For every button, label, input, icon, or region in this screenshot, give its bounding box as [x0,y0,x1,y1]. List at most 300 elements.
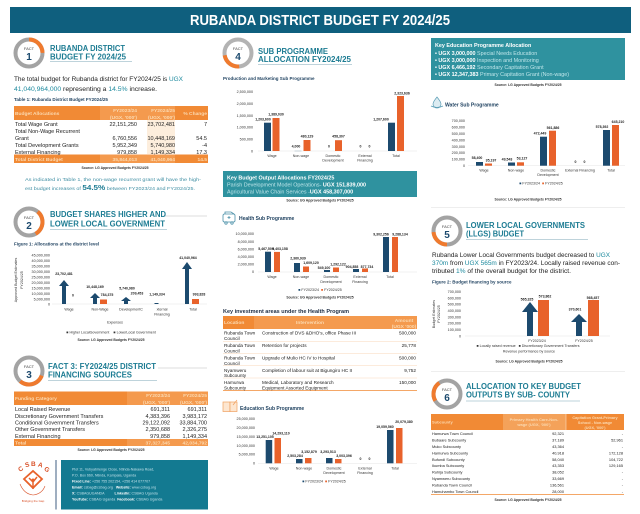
chart: financing by source: Budget Estimates [432,300,436,328]
table: funding category: 1,149,334 [183,434,207,440]
table: budget allocations: 5,740,980 [151,143,175,149]
chart: production and marketing: 2,000,000 [237,102,253,106]
table: health investments: Construction of DVS &DHO's, office Phase III [262,330,356,336]
chart: allocations: Non-Wage [91,308,109,312]
chart: allocations: Approved Budget Estimates [14,258,18,302]
table: funding category: Discretionary Government Transfers [15,414,104,420]
table: health investments: Hamurwa [224,380,244,385]
chart: education: Financing [357,471,373,475]
table: budget allocations: Total Wage Grant [15,122,58,128]
chart: water: 0 [584,160,586,164]
table: health investments: (UGX '000) [392,324,417,330]
heading: fact 6 [466,382,581,401]
icon: ambulance [223,212,235,224]
divider bar [56,460,57,510]
icon: fact 2 ring: FACT [24,215,35,220]
panel: contact details: Email: csbag@csbag.org Website: www.csbag.org [72,486,156,490]
table: health investments [223,316,417,390]
table: health investments: Upgrade of Mulio HC IV to Hospital [262,356,335,360]
source note: Source: LG Approved Budgets FY2024/25 [78,448,145,452]
panel: contact details: Plot 11, Vubyabirenge Close, Ntinda-Nakawa Road, [72,468,154,472]
chart: allocations: 5,740,980 [119,286,135,290]
chart: health: ■ FY2023/24 ■ FY2024/25 [298,288,342,292]
chart: financing by source: 370,601 [569,308,581,312]
table: funding category: (UGX, '000') [180,400,207,406]
chart: production and marketing: 2,500,000 [237,90,253,94]
icon: fact 6 ring [429,376,465,412]
chart: production and marketing: 4,000 [292,144,300,148]
chart: financing by source: FY2023/24 [528,339,546,343]
chart: health: 4,000,000 [238,255,254,259]
panel: contact details: YouTube: CSBAG Uganda Facebook: CSBAG Uganda [72,498,162,502]
heading: fact 3: FACT 3: FY2024/25 DISTRICT [48,362,156,371]
chart: health: 1,292,122 [330,263,346,267]
table: budget allocations: External Financing [15,150,61,156]
chart: allocations: 209,453 [131,292,143,296]
table: allocations by sub-county: 52,961 [611,438,623,443]
chart: water: Wage [479,168,489,172]
chart: education: 3,003,396 [336,454,352,458]
chart: health: 549,100 [318,266,330,270]
chart: allocations: 23,702,481 [55,272,73,276]
icon: fact 2 ring: 2 [26,221,32,232]
icon: fact 1 ring: 1 [26,52,32,63]
chart: education: 3,293,513 [320,450,336,454]
chart: production and marketing: Wage [267,154,277,158]
table: funding category: Funding Category [15,396,57,402]
chart: health: Total [386,275,394,279]
table: funding category: FY2024/25 [183,393,207,399]
chart: financing by source: 600,000 [448,296,461,300]
callout: key budget outputs [223,171,417,197]
chart: water: 0 [463,164,465,168]
text block: LLG budget: 370m from UGX 565m in FY2023/24. Locally raised revenue con- [432,260,620,267]
logo: CSBAG: A [37,462,44,470]
chart: water: 472,449 [534,132,546,136]
table: health investments: Rubanda Town [224,330,256,336]
table: health investments: Council [224,336,240,341]
table: budget allocations: -4 [202,143,207,149]
chart: health: 9,288,134 [392,232,408,236]
chart: health: 2,000,000 [238,263,254,267]
chart: health: 904,858 [346,265,358,269]
chart: production and marketing: Non-wage [293,154,309,158]
table: budget allocations: 17.3 [196,150,207,156]
table: health investments: Rubanda Town [224,356,256,360]
table: health investments: 500,000 [399,330,416,336]
chart: health: 8,000,000 [238,240,254,244]
heading: fact 4: ALLOCATION FY2024/25 [258,55,352,64]
chart: education: Total [391,466,399,470]
chart: allocations: 25,000,000 [32,276,50,280]
table: funding category: 2,350,688 [146,427,170,433]
chart: allocations: ■ Higher LocalGovernment ■ LowerLocal Government [66,330,156,334]
chart: production and marketing: 500,000 [240,138,253,142]
table: budget allocations: (UGX, '000') [110,115,137,121]
icon: fact 6 ring: FACT [442,387,453,392]
icon: fact 4 ring: 4 [235,52,241,63]
chart: education: 0 [369,457,371,461]
icon: fact 1 ring: FACT [24,46,35,51]
chart: water [452,119,625,186]
table: health investments: Medical, Laboratory and Research [262,380,334,385]
chart: education: 0 [360,457,362,461]
table: allocations by sub-county: - [622,476,624,481]
table: allocations by sub-county: Nyamweru Subcounty [432,476,470,481]
table: health investments: Nyamweru [224,368,247,373]
chart: allocations: 5,000,000 [34,298,50,302]
text block: LLG budget: tributed 1% of the overall budget for the district. [432,268,571,275]
chart: water: 49,543 [502,158,512,162]
table: allocations by sub-county: Primary Health Care-Non- [510,417,559,422]
heading: fact 3: FINANCING SOURCES [48,370,133,380]
table: funding category: 37,327,345 [146,440,170,446]
chart: production and marketing: 0 [328,144,330,148]
chart: allocations: 10,000,000 [32,292,50,296]
table: allocations by sub-county: Hamurwa Town Council [432,431,473,436]
chart: water: 500,000 [452,132,465,136]
table: allocations by sub-county: 40,918 [552,450,564,455]
chart: financing by source: 0 [459,334,461,338]
chart: health: External [353,275,367,279]
callout: highest increase: est budget increases of 54.5% between FY2023/24 and FY2024/25. [25,185,195,192]
table: health investments: Subcounty [224,386,247,390]
table: health investments: Retention for projects [262,343,307,348]
icon: open book [223,400,237,412]
table: health investments: Location [224,320,244,326]
table: budget allocations: 14.5 [197,157,207,163]
chart: allocations: Expenses [107,320,123,324]
icon: water drop [431,97,443,108]
table: health investments: Council [224,348,240,354]
table: allocations by sub-county: Muko Subcounty [432,444,461,449]
chart: health: 6,000,000 [238,247,254,251]
chart: water: 200,000 [452,151,465,155]
panel: fact 4 [223,38,417,202]
heading: fact 4: SUB PROGRAMME [258,47,329,56]
chart: education: 25,000,000 [237,417,255,421]
chart: water: 35,197 [486,158,496,162]
source note: Source: LG Approved Budgets FY2024/25 [78,338,145,342]
panel: water sub programme [431,97,625,202]
table: allocations by sub-county: Hamurwa Subcounty [432,450,468,455]
chart: water: 58,400 [472,156,482,160]
chart: production and marketing [237,90,417,162]
table: funding category: 979,858 [150,434,170,440]
chart: water: 600,000 [452,126,465,130]
title banner: RUBANDA DISTRICT BUDGET FY 2024/25 [190,13,450,29]
table: allocations by sub-county: 92,321 [552,431,564,436]
chart: health: Development [320,280,342,284]
table: health investments: 500,000 [399,356,416,360]
chart: education: 0 [253,462,255,466]
chart: health: 5,403,158 [272,247,288,251]
source note: Source: LG Approved Budgets FY2024/25 [495,83,562,87]
chart: allocations: 0 [72,294,74,298]
logo: CSBAG: B [31,461,36,468]
heading: fact 1: BUDGET FY 2024/25 [50,52,127,62]
panel: fact 1 [14,40,208,192]
chart: financing by source [432,290,610,354]
table: budget allocations: 22,151,250 [109,122,137,128]
heading: water: Water Sub Programme [445,102,499,108]
chart: education: Non-wage [296,466,312,470]
icon: fact 5 ring [434,218,460,244]
logo: CSBAG: C [17,465,25,474]
chart: health: 9,302,256 [373,232,389,236]
chart: allocations: xternal [157,308,168,312]
chart: water: ■ FY2023/24 ■ FY2024/25 [519,182,563,186]
chart: water: 300,000 [452,145,465,149]
chart: education: Wage [269,466,279,470]
chart: education: 15,000,000 [237,435,255,439]
panel: contact details [61,460,208,510]
chart: water: Total [607,168,615,172]
table: allocations by sub-county: - [622,482,624,487]
text block: LLG budget [432,252,620,275]
table: budget allocations: Total Non-Wage Recurrent [15,129,80,135]
table: health investments: Intervention [296,320,324,326]
chart: allocations: 15,000,000 [32,286,50,290]
logo: CSBAG [17,461,51,503]
table: budget allocations: (UGX, '000') [148,115,175,121]
icon: fact 4 ring: FACT [233,46,244,51]
heading: fact 1 [50,44,132,62]
table: budget allocations [14,106,208,163]
callout: key education allocation: Key Education Programme Allocation [435,43,531,49]
panel: fact 2 [10,203,207,342]
text block: total budget: 41,040,964,000 representing a 14.5% increase. [14,86,157,93]
icon: fact 5 ring: 5 [444,230,450,241]
chart: financing by source: 568,457 [587,296,599,300]
table: allocations by sub-county: Rubanda Town Council [432,482,472,487]
chart: education: 20,000,000 [237,426,255,430]
chart: production and marketing: 1,203,600 [255,118,271,122]
table: allocations by sub-county: 172,128 [609,450,623,455]
table: allocations by sub-county: School - Non-wage [578,421,612,425]
heading: fact 5: (LLGS) BUDGET [466,230,524,238]
table: funding category: Other Government Transfers [15,427,85,433]
table: allocations by sub-county: 58,040 [552,457,565,462]
table: budget allocations: Budget Allocations [15,111,60,117]
table: budget allocations: Total District Budget [15,157,63,163]
chart: education: ■ FY2023/24 ■ FY2024/25 [302,480,346,484]
chart: financing by source: 500,000 [448,303,461,307]
chart: allocations: 45,000,000 [32,254,50,258]
icon: fact 4 ring [223,38,253,68]
heading: fact 5: LOWER LOCAL GOVERNMENTS [466,221,586,230]
chart: allocations: 41,040,964 [179,256,197,260]
heading: fact 2: LOWER LOCAL GOVERNMENT [50,220,165,228]
chart: allocations: 10,448,169 [86,285,104,289]
callout: key budget outputs: Agricultural Value Chain Services -UGX 458,307,000 [227,190,353,196]
chart: production and marketing: 480,129 [301,134,313,138]
table: health investments: Council [224,361,240,366]
chart: water: 561,886 [547,126,559,130]
chart: allocations: 784,375 [101,293,113,297]
chart: production and marketing: 1,207,600 [373,118,389,122]
table: allocations by sub-county: Ikumba Subcounty [432,463,464,468]
panel: contact details: P.O. Box 660, Ntinda, Kampala, Uganda [72,474,136,478]
chart: allocations: 20,000,000 [32,281,50,285]
table: health investments: Completion of labour suit at Bigungiro HC II [262,368,352,373]
source note: Source: LG Approved Budgets FY2024/25 [496,360,563,364]
chart: health [236,232,417,292]
heading: fact 2 [50,210,207,230]
chart: production and marketing: Domestic [326,154,341,158]
panel: fact 5 [431,208,625,372]
table: health investments: 150,000 [399,380,416,385]
callout: key education allocation [431,38,625,80]
chart: production and marketing: 1,389,030 [268,112,284,116]
table: funding category: 29,122,092 [142,420,170,426]
chart: education: 20,079,380 [395,420,413,424]
table: allocations by sub-county: wage (UGX, '000') [516,422,551,427]
chart: education: Domestic [327,466,342,470]
chart: education: 2,503,284 [287,454,303,458]
table: allocations by sub-county: 43,364 [552,444,565,449]
table: funding category: 691,311 [151,407,170,413]
table: health investments: Rubanda Town [224,343,256,348]
chart: allocations: DevelopmentC [119,308,143,312]
table: budget allocations: 1,149,334 [151,150,175,156]
heading: fact 6: OUTPUTS BY SUB- COUNTY [466,390,571,400]
chart: financing by source: 700,000 [448,290,461,294]
chart: production and marketing: 0 [360,144,362,148]
chart: production and marketing: Financing [357,158,373,162]
callout: highest increase: As indicated in Table 1, the non-wage recurrent grant will have the high- [25,177,202,182]
table: allocations by sub-county: - [622,489,624,494]
chart: production and marketing: 1,500,000 [237,114,253,118]
table: budget allocations: 23,702,481 [147,122,175,128]
table: allocations by sub-county: Bubaare Subcounty [432,438,466,443]
text block: total budget [14,76,183,93]
chart: allocations: Total [189,308,197,312]
table: allocations by sub-county: (UGX, '000') [584,426,606,430]
chart: financing by source: 100,000 [448,328,461,332]
table: allocations by sub-county: Bufundi Subcounty [432,457,465,462]
chart: water: 400,000 [452,138,465,142]
chart: health: Domestic [324,275,339,279]
chart: production and marketing: 2,323,636 [394,92,410,96]
table: allocations by sub-county: - [622,444,624,449]
chart: production and marketing: Total [392,154,400,158]
chart: water: External Financing [565,168,595,172]
chart: financing by source: Revenue performance by source [503,350,555,354]
chart: allocations: FY2024/25 [20,271,24,289]
panel: education sub programme [223,400,417,484]
table: allocations by sub-county: 38,052 [552,470,564,475]
callout: key budget outputs: Key Budget Output Allocations FY2024/25 [227,176,334,182]
chart: education [237,417,417,484]
chart: education: External [358,466,372,470]
table: funding category: 4,383,396 [146,414,170,420]
chart: financing by source: FY2024/25 [575,339,593,343]
table: allocations by sub-county: 43,353 [552,463,564,468]
heading: fact 1: RUBANDA DISTRICT [50,44,125,53]
heading: fact 3 [48,362,207,380]
chart: water: Non-wage [508,168,524,172]
table: funding category: (UGX, '000') [143,400,170,406]
table: allocations by sub-county: Subcounty [432,420,453,424]
chart: production and marketing: 0 [251,149,253,153]
chart: health: Wage [267,275,277,279]
table: budget allocations: 979,858 [117,150,137,156]
figure caption: Figure 2: Budget financing by source [432,280,512,284]
table: funding category: 2,326,275 [183,427,207,433]
chart: water: 700,000 [452,119,465,123]
chart: water: 645,210 [612,120,624,124]
heading: education: Education Sub Programme [240,406,304,412]
chart: allocations: 1,149,334 [149,292,165,296]
sub-heading: production: Production and Marketing Sub Programme [223,76,315,81]
source note: Source: LG Approved Budgets FY2024/25 [495,198,562,202]
chart: health: 10,000,000 [236,232,254,236]
panel: contact details: X: CSBAGUGANDA LinkedIn: CSBAG Uganda [72,492,158,496]
table: allocations by sub-county: 37,189 [552,438,564,443]
chart: education: 10,000,000 [237,444,255,448]
heading: fact 6: ALLOCATION TO KEY BUDGET [466,382,581,391]
chart: education: 19,059,560 [376,425,394,429]
table: funding category: Local Raised Revenue [15,407,70,413]
chart: health: Non-wage [293,275,309,279]
table: budget allocations: 35,844,013 [113,157,137,163]
chart: education: 3,152,879 [301,450,317,454]
table: allocations by sub-county: 104,722 [609,457,623,462]
table: budget allocations: 54.5 [196,136,207,142]
callout: highest increase [25,177,202,192]
chart: financing by source: 200,000 [448,322,461,326]
chart: water: Development [537,173,559,177]
table: health investments: Equipment Assorted Equipment [262,386,328,390]
table: funding category [14,392,208,446]
table: health investments: 9,752 [404,368,416,373]
text block: total budget: The total budget for Rubanda district for FY2024/25 is UGX [14,76,183,83]
chart: allocations: 0 [48,302,50,306]
panel: health sub programme [223,212,417,390]
chart: allocations: Financing [154,312,170,316]
chart: health: 5,467,509 [258,247,274,251]
chart: production and marketing: 0 [369,144,371,148]
chart: financing by source: 400,000 [448,309,461,313]
chart: education: 14,293,110 [272,432,290,436]
icon: fact 3 ring: 3 [26,370,32,381]
table: funding category: Conditional Government Transfers [15,420,99,426]
chart: allocations: 35,000,000 [32,264,50,268]
chart: education: Development [323,471,345,475]
table: allocations by sub-county: - [622,431,624,436]
table: budget allocations: 6,760,556 [113,136,137,142]
table: funding category: 33,884,700 [179,420,207,426]
title banner [10,7,631,33]
chart: water: 578,392 [596,125,608,129]
table: budget allocations: 41,040,964 [151,157,175,163]
table: funding category: 42,034,792 [183,440,207,446]
chart: financing by source: ■ Locally raised revenue ■ Discretionary Government Transfers [476,344,580,348]
table: allocations by sub-county: 129,165 [609,463,623,468]
chart: allocations: 30,000,000 [32,270,50,274]
table: funding category: 3,983,172 [183,414,207,420]
table: funding category: FY2023/24 [146,393,170,399]
table: budget allocations: % Change [183,111,207,117]
logo: CSBAG: S [24,461,31,469]
table: funding category: External Financing [15,434,61,440]
chart: health: Financing [352,280,368,284]
chart: allocations: 993,828 [193,292,205,296]
heading: health: Health Sub Programme [239,216,295,222]
chart: allocations [14,254,207,334]
chart: health: 0 [252,270,254,274]
